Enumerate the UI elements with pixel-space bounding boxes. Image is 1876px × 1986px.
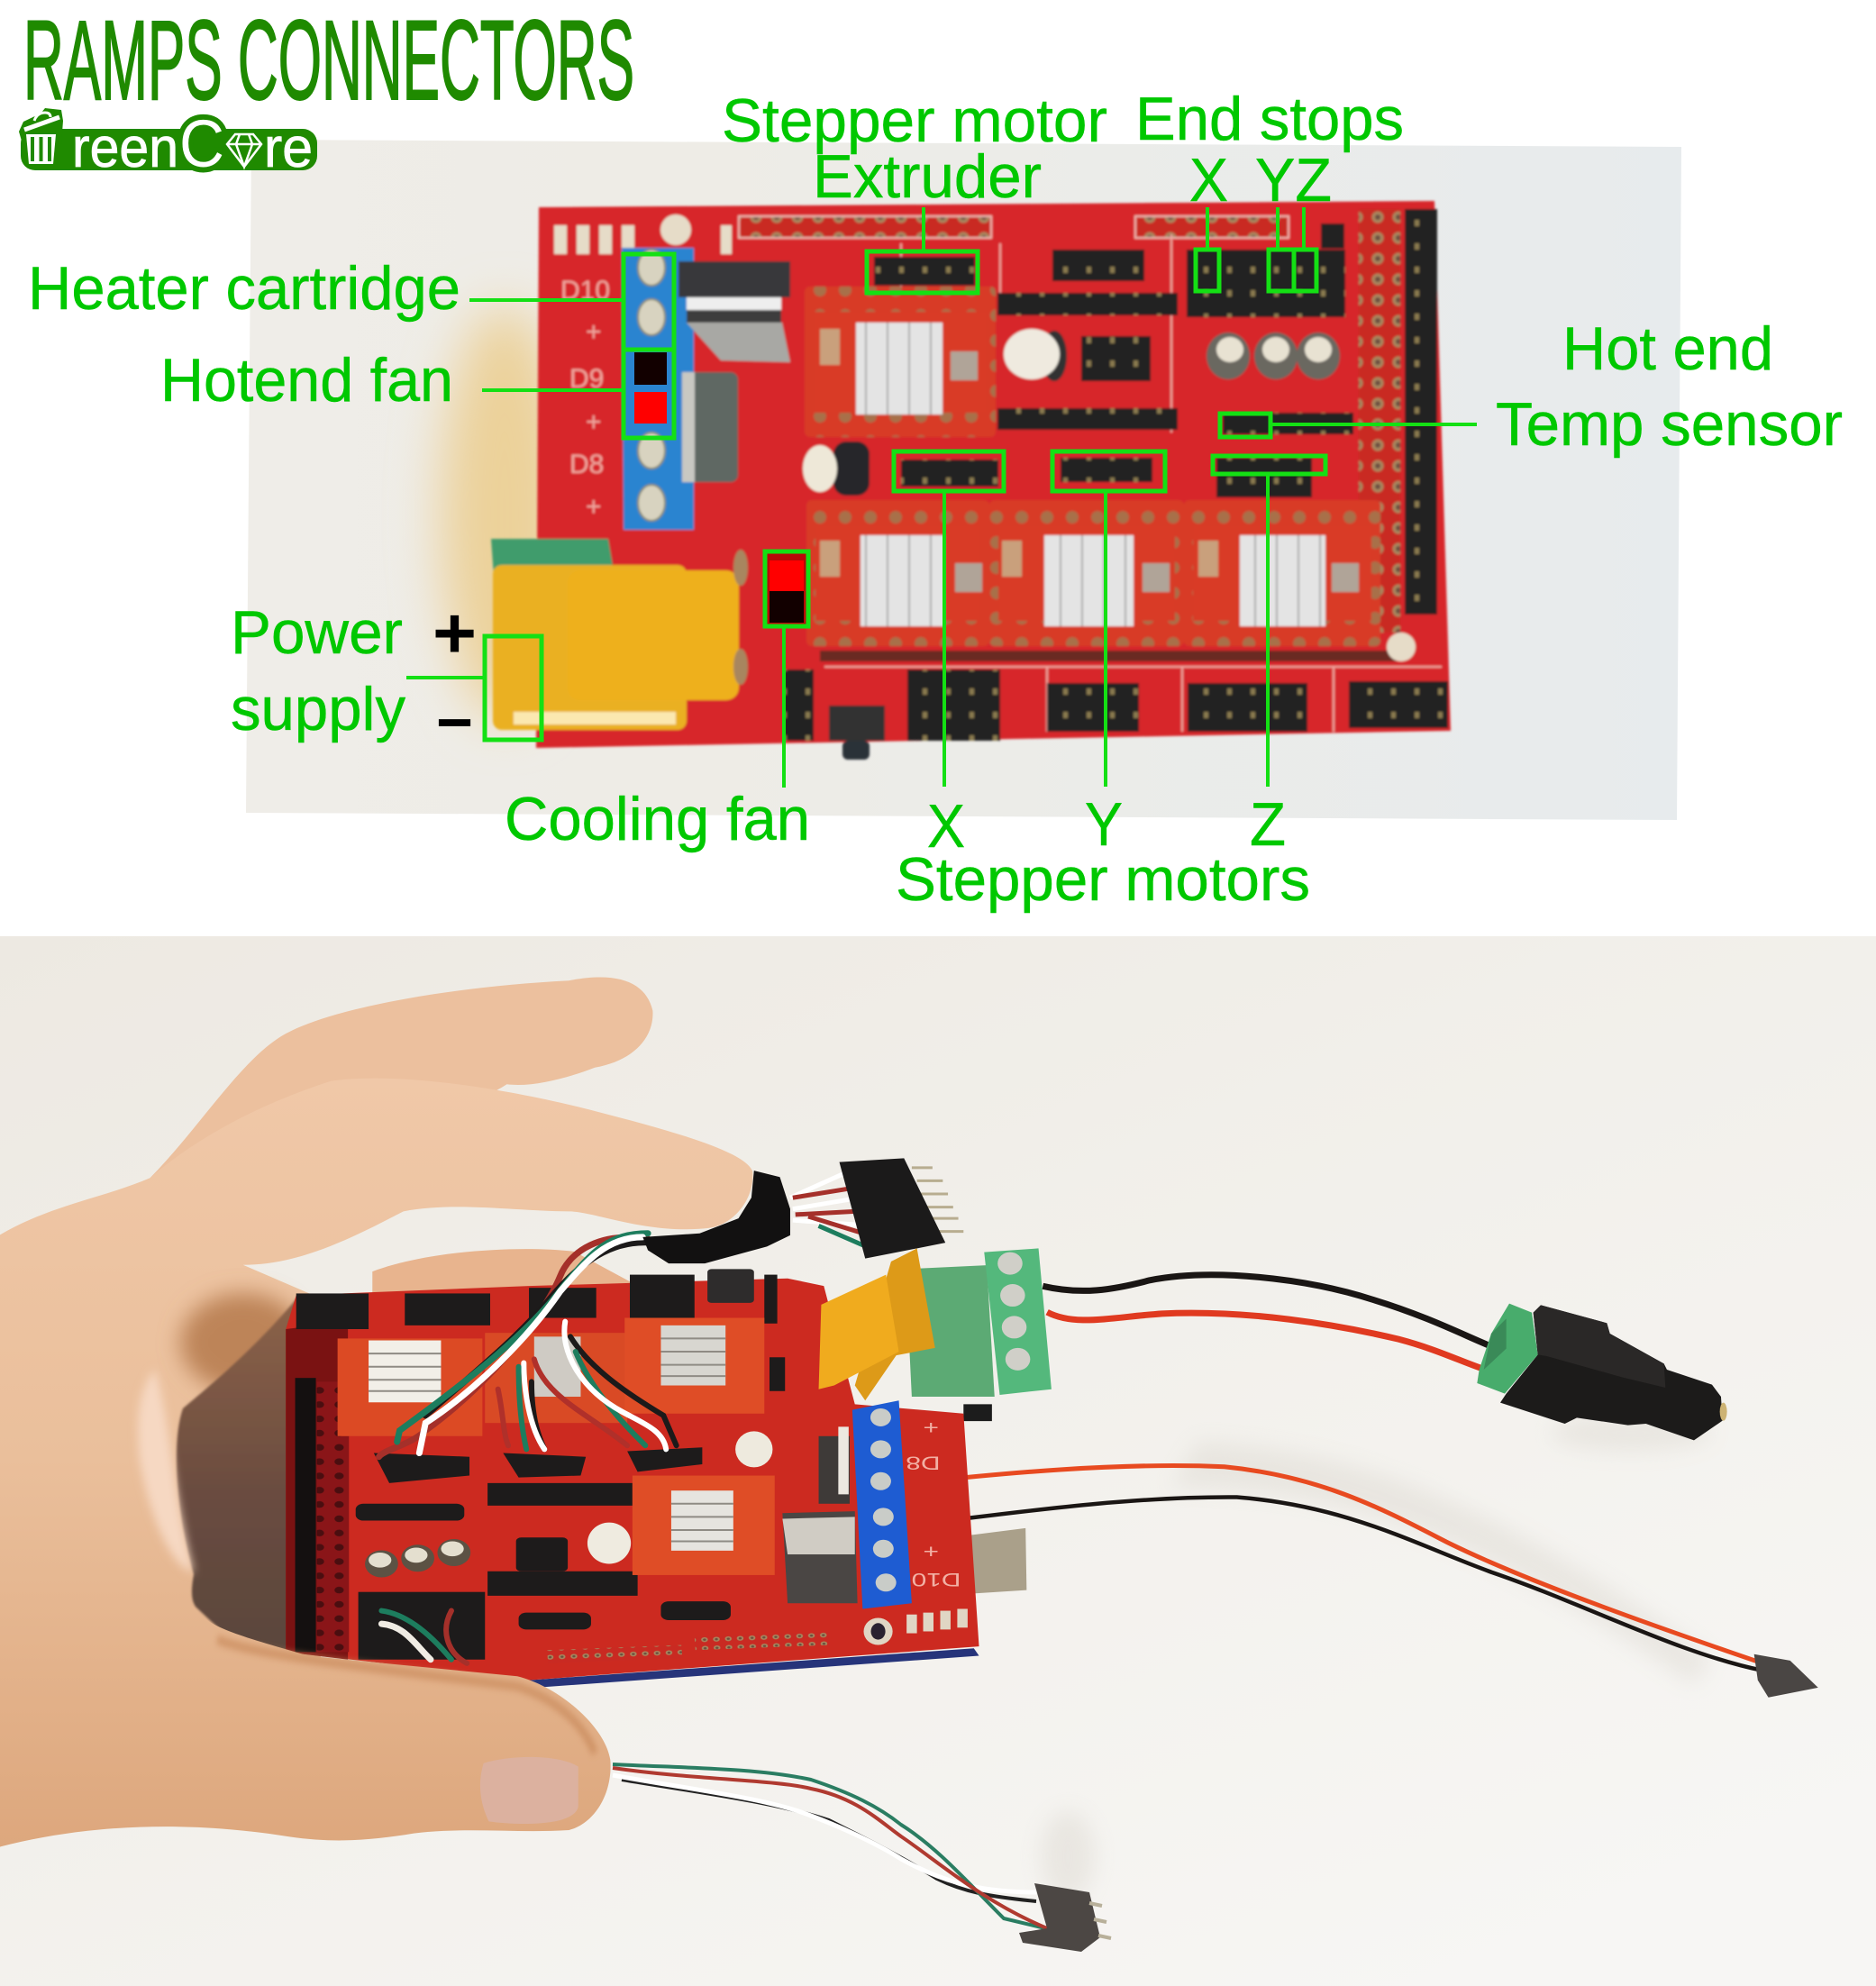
pin row [695,1632,830,1650]
thumbnail [480,1757,578,1824]
hand [0,978,752,1847]
silkscreen: D8 [906,1453,940,1475]
wires on board [379,1234,677,1663]
silkscreen: D10 [912,1569,961,1591]
finger: top [150,978,652,1178]
USB shell [966,1528,1026,1594]
board: RAMPS top view [491,201,1451,760]
labels on board: + [586,492,602,522]
labels: connector callouts: X [1189,146,1228,214]
gap between palm and board [177,1298,297,1653]
labels: connector callouts: X [927,792,965,861]
labels: connector callouts: Stepper motors [896,845,1310,914]
annotation boxes and leader lines [406,207,1477,788]
annotation: cooling fan polarity blocks [766,551,807,625]
stepper drivers [805,287,1380,646]
soft shadows on backdrop [1041,1415,1712,1901]
electrolytic capacitors [365,1431,772,1577]
terminal: blue [852,1400,912,1608]
labels: connector callouts: Temp sensor [1496,390,1843,459]
LEDs and mounting hole [554,214,1416,661]
pin headers [784,223,1448,760]
labels on board: D9 [569,364,604,394]
wire: heater red and black pair [914,1465,1818,1698]
labels: connector callouts: − [436,687,473,759]
labels: connector callouts: + [433,593,477,673]
labels: connector callouts: Cooling fan [505,785,810,853]
text: RAMPS CONNECTORS [23,0,634,123]
silkscreen: + [924,1417,939,1439]
headers on board [296,1269,785,1660]
icon: diamond [227,134,261,167]
silkscreen: + [924,1540,939,1562]
annotation: hotend fan polarity blocks [634,352,667,424]
labels: connector callouts: Hotend fan [160,346,453,415]
panel: hand holding wired board photo [0,936,1876,1986]
board: RAMPS in hand [286,1158,1052,1688]
labels: connector callouts: Stepper motor [722,87,1107,155]
labels on board: D8 [569,450,604,479]
terminal: green plug [906,1248,1052,1397]
LEDs and mounting hole [863,1608,968,1644]
wire: power black and red pair [914,1275,1818,1698]
labels: connector callouts: Hot end [1562,314,1773,383]
panel: annotated RAMPS board photo [246,140,1681,820]
terminal block: blue [622,248,694,530]
labels: connector callouts [28,85,1843,914]
silkscreen [906,1417,961,1591]
labels: connector callouts: Extruder [813,142,1042,211]
labels: connector callouts: Power [231,598,403,667]
palm and index finger [0,1079,752,1847]
labels: connector callouts: supply [231,675,405,743]
connector: 10-pin ribbon with wires [790,1158,963,1259]
mosfets [678,261,790,482]
thumb [0,1606,611,1847]
palm shading around gap [180,1293,306,1392]
labels on board: + [586,317,602,347]
connector: DC barrel jack [1477,1304,1727,1440]
capacitor: yellow [819,1248,935,1400]
labels on board: + [586,407,602,437]
icon: trash can with lid [19,108,63,164]
finger: rear [372,1249,636,1298]
warm shadow beside board [442,306,568,721]
electrolytic capacitors [803,329,1340,496]
mosfets [782,1426,858,1603]
green terminal plug [491,539,613,577]
palm highlight [138,1370,194,1572]
yellow power capacitor [493,565,739,730]
ferrite core [642,1171,790,1263]
thumb top shading [217,1639,595,1754]
labels: connector callouts: Y [1085,790,1123,859]
labels on board: D10 [560,276,610,305]
labels: connector callouts: YZ [1255,146,1332,214]
logo: GreenCore [19,106,317,181]
labels: connector callouts: End stops [1135,85,1404,153]
wire: sensor bundle to small connector [613,1764,1111,1952]
logo: GreenCore: re [264,117,313,179]
labels on board [560,276,610,522]
connector: 4-pin header [1019,1883,1111,1952]
silkscreen pin rows [739,216,991,238]
labels: connector callouts: Z [1250,790,1286,859]
logo: GreenCore: C [179,106,224,181]
stepper drivers [338,1318,775,1575]
logo: GreenCore: reen [72,117,178,179]
labels: connector callouts: Heater cartridge [28,254,460,323]
